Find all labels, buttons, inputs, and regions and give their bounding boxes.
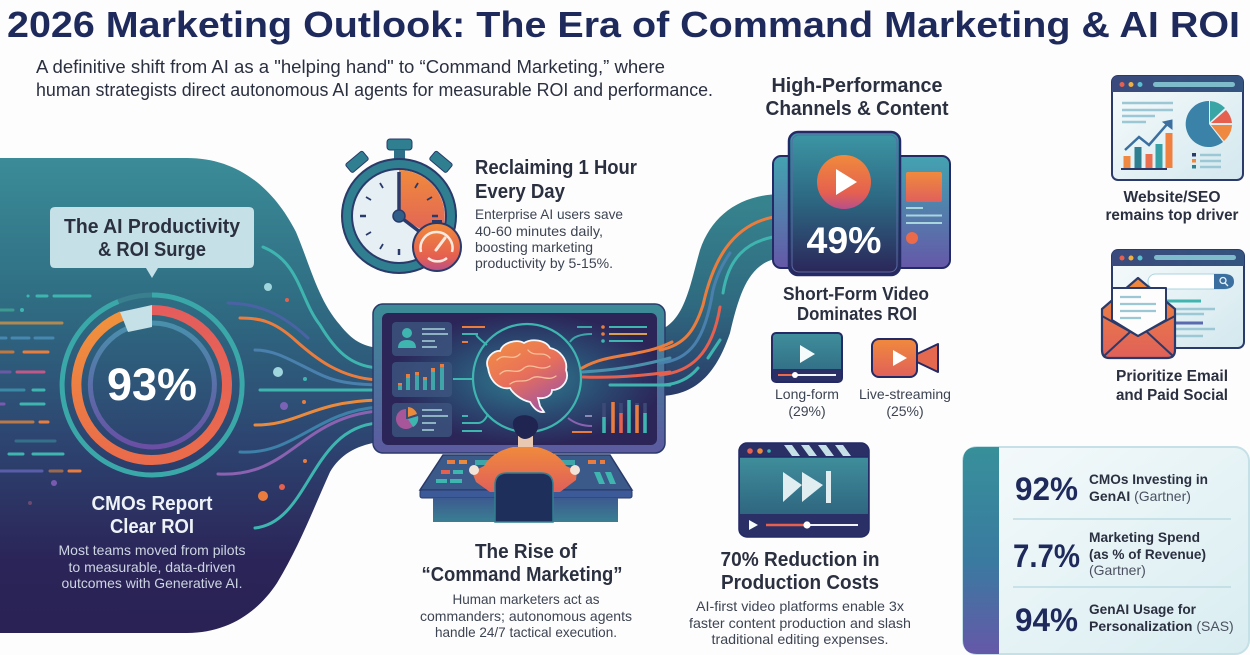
brain icon [487,340,567,412]
text: 70% reduction: faster content production and slash [689,615,911,631]
text: website/SEO [1106,189,1238,224]
stat: 94%: Personalization (SAS) [1089,618,1234,634]
ring chart 93%: 93% [107,359,197,410]
text: 70% reduction: 70% Reduction in [720,549,880,571]
stat: 92%: 92% [1015,471,1078,507]
caption: CMOs report clear ROI: CMOs Report [92,493,213,515]
text: reclaiming 1 hour: Reclaiming 1 Hour [475,157,637,179]
monitor: command center [373,304,672,453]
band stream lines [660,216,780,385]
icon: live-streaming camera [872,339,938,377]
chair [495,473,553,522]
text: rise of command marketing: commanders; autonomous agents [420,608,632,624]
monitor screen [382,313,657,445]
text: reclaiming 1 hour: productivity by 5-15%. [475,255,613,271]
text: long-form and live-streaming labels: (29%) [788,403,826,419]
caption: CMOs report clear ROI: outcomes with Generative AI. [62,575,242,591]
console buttons [436,460,616,484]
text: reclaiming 1 hour: Every Day [475,181,566,203]
stat: 94%: 94% [1015,602,1078,638]
text: rise of command marketing: The Rise of [475,541,577,563]
text: rise of command marketing [420,541,632,640]
icon: email and search browser [1102,250,1244,358]
text: website/SEO: Website/SEO [1124,189,1220,206]
heading: high-performance channels: High-Performance [772,75,942,97]
ring chart 93% [62,295,242,475]
circuit lines [453,325,647,432]
text: reclaiming 1 hour: boosting marketing [475,239,593,255]
text: long-form and live-streaming labels: Live-streaming [859,386,951,402]
dashboard panel: profile [392,322,452,356]
panel: key stats [963,447,1249,654]
hub circle [473,324,581,432]
panel background flow shape [0,158,378,633]
text: reclaiming 1 hour: 40-60 minutes daily, [475,223,603,239]
text: 70% reduction: Production Costs [721,572,879,594]
dashboard panel: pie [392,403,452,437]
title: 2026 Marketing Outlook: The Era of Command Marketing & AI ROI [7,4,1240,45]
heading: high-performance channels: Channels & Content [766,98,949,120]
heading: high-performance channels [766,75,949,120]
icon: video cards 49% [773,132,950,275]
stat: 7.7%: 7.7% [1013,538,1080,574]
icon: website analytics browser [1112,76,1243,180]
text: long-form and live-streaming labels: Long-form [775,386,839,402]
stat: 7.7%: (as % of Revenue) [1089,546,1206,562]
stat: 7.7%: Marketing Spend [1089,529,1200,545]
stat: 7.7% [1013,529,1206,578]
text: long-form and live-streaming labels [775,386,951,419]
person at console [469,415,580,522]
callout heading: & ROI Surge [98,239,206,261]
subtitle: human strategists direct autonomous AI agents for measurable ROI and performance. [36,80,713,100]
panel: AI productivity and ROI surge [0,158,378,633]
stat: 7.7%: (Gartner) [1089,562,1146,578]
text: prioritize email: Prioritize Email [1116,368,1228,385]
text: prioritize email [1116,368,1228,404]
text: long-form and live-streaming labels: (25%) [886,403,924,419]
caption: CMOs report clear ROI: Clear ROI [110,516,194,538]
text: rise of command marketing: handle 24/7 tactical execution. [435,624,617,640]
text: short-form video [783,284,929,324]
dashboard panel: bars [392,362,452,397]
text: prioritize email: and Paid Social [1116,387,1228,404]
icon: video editor skip forward [739,443,869,537]
console desk [420,455,632,522]
data streams left [0,296,90,505]
stream lines out of brain [582,342,672,385]
text: rise of command marketing: Human marketers act as [452,591,600,607]
stat: 94% [1015,601,1234,638]
stat: 94%: GenAI Usage for [1089,601,1197,617]
envelope [1102,278,1175,358]
text: reclaiming 1 hour [475,157,637,271]
text: 70% reduction [689,549,911,647]
data streams right [218,247,378,528]
text: website/SEO: remains top driver [1106,207,1238,224]
text: 70% reduction: AI-first video platforms enable 3x [696,598,904,614]
icon: long-form video [772,333,842,382]
text: 70% reduction: traditional editing expenses. [712,631,888,647]
stat: 92% [1015,471,1208,507]
icon: video cards 49%: 49% [806,220,882,261]
subtitle: A definitive shift from AI as a "helping hand" to “Command Marketing,” where [36,57,665,77]
caption: CMOs report clear ROI [58,493,246,591]
subtitle [36,57,713,100]
icon: stopwatch [341,139,461,274]
text: rise of command marketing: “Command Marketing” [422,564,622,586]
stat: 92%: GenAI (Gartner) [1089,488,1191,504]
text: short-form video: Short-Form Video [783,284,929,304]
connector band to channels [660,194,780,396]
mini bar chart [604,400,645,433]
text: short-form video: Dominates ROI [797,304,917,324]
caption: CMOs report clear ROI: to measurable, data-driven [68,559,236,575]
monitor frame [373,304,665,453]
callout heading [50,207,254,278]
caption: CMOs report clear ROI: Most teams moved from pilots [58,542,246,558]
callout heading: The AI Productivity [64,216,241,238]
text: reclaiming 1 hour: Enterprise AI users save [475,206,623,222]
stat: 92%: CMOs Investing in [1089,471,1208,487]
